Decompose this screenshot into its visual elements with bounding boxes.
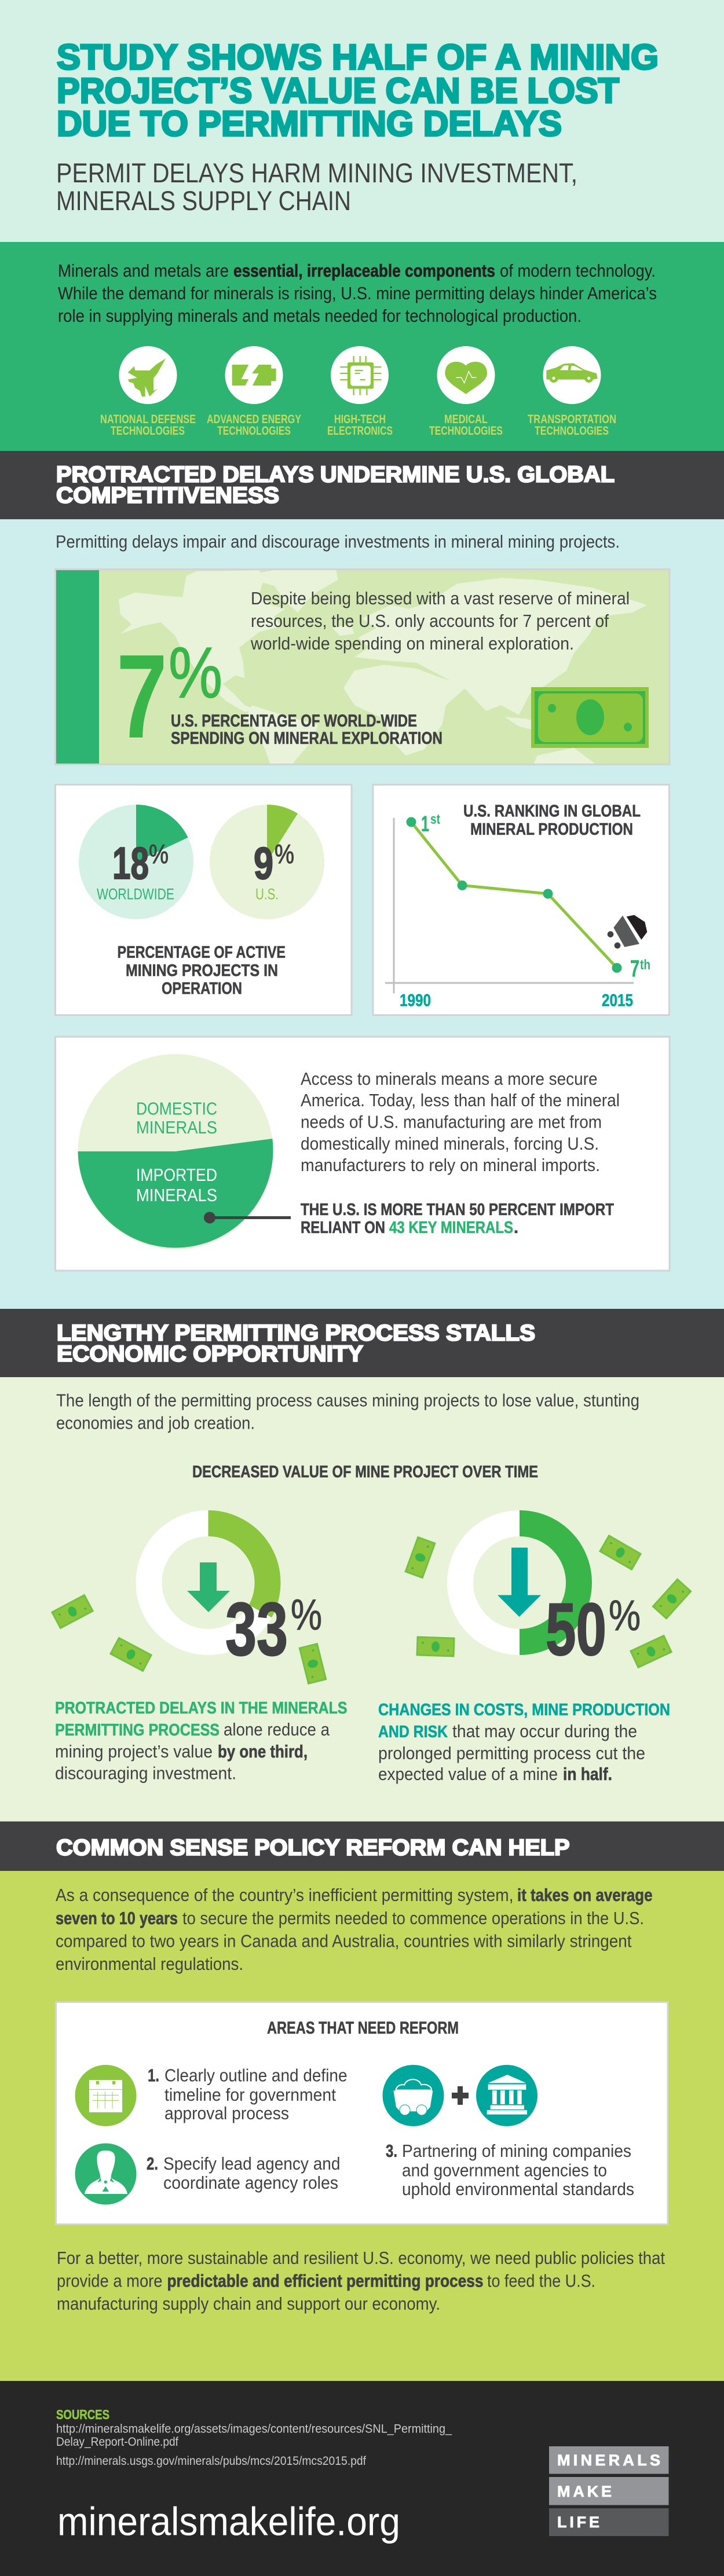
chart title: decreased value: DECREASED VALUE OF MINE PROJECT OVER TIME <box>192 1463 538 1481</box>
pie chart: worldwide <box>79 805 193 919</box>
text: reform intro: to secure the permits needed to commence operations in the U.S. <box>182 1908 644 1928</box>
heading: protracted delays: COMPETITIVENESS <box>56 483 279 508</box>
icon: dollar bill <box>531 687 649 748</box>
logo: minerals make life: LIFE <box>557 2513 599 2531</box>
text: protracted delays stat: PERMITTING PROCESS <box>55 1721 220 1740</box>
text: protracted delays stat: PROTRACTED DELAYS IN THE MINERALS <box>55 1699 348 1718</box>
logo: minerals make life: MINERALS <box>557 2452 660 2469</box>
sources: http://mineralsmakelife.org/assets/images/content/resources/SNL_Permitting_ <box>56 2422 452 2436</box>
icon labels: TECHNOLOGIES <box>535 424 609 438</box>
text: reform intro: As a consequence of the country’s inefficient permitting system, <box>56 1885 513 1905</box>
icon labels: ELECTRONICS <box>327 424 393 438</box>
text: changes in costs stat <box>378 1701 670 1784</box>
item 2 text <box>147 2153 341 2193</box>
body text: manufacturers to rely on mineral imports. <box>301 1155 600 1175</box>
icon: government building <box>476 2065 537 2126</box>
sources: SOURCES <box>56 2407 109 2422</box>
icon: battery <box>225 346 283 404</box>
website: mineralsmakelife.org <box>57 2500 400 2544</box>
text: reform intro <box>56 1885 652 1974</box>
body text: America. Today, less than half of the mineral <box>301 1090 620 1110</box>
panel: minerals and technology intro <box>0 242 724 452</box>
pie chart: domestic vs imported: MINERALS <box>136 1117 217 1137</box>
caption: MINING PROJECTS IN <box>126 962 278 980</box>
caption: PERCENTAGE OF ACTIVE <box>117 944 286 962</box>
panel: 7 percent spending <box>56 570 670 764</box>
text: protracted delays stat: mining project’s value <box>55 1741 213 1762</box>
body text: needs of U.S. manufacturing are met from <box>301 1111 602 1132</box>
pie chart: domestic vs imported <box>78 1054 291 1249</box>
item 1 text: 1. <box>148 2065 159 2085</box>
text: reform conclusion: predictable and efficient permitting process <box>167 2270 483 2291</box>
subtitle: MINERALS SUPPLY CHAIN <box>56 185 351 216</box>
panel: global competitiveness section background <box>0 519 724 1309</box>
item 3 text <box>386 2141 634 2199</box>
icon: plus <box>452 2086 469 2105</box>
item 1 text: timeline for government <box>164 2085 336 2105</box>
world map <box>119 570 647 764</box>
panel: policy reform section background <box>0 1871 724 2381</box>
icon labels: TECHNOLOGIES <box>429 424 503 438</box>
icons: falling money <box>51 1535 692 1685</box>
line chart: 7 <box>630 955 639 982</box>
icon labels: ADVANCED ENERGY <box>207 413 301 426</box>
logo: minerals make life <box>549 2446 668 2536</box>
pie chart: worldwide: 18 <box>112 838 149 889</box>
body text <box>301 1069 620 1175</box>
icon: heart with pulse <box>437 346 495 404</box>
text: reform conclusion: provide a more <box>57 2270 162 2291</box>
body text: Access to minerals means a more secure <box>301 1069 598 1089</box>
item 2 text: 2. <box>147 2153 158 2174</box>
intro text: While the demand for minerals is rising, U.S. mine permitting delays hinder America’s <box>58 283 657 303</box>
item 3 text: 3. <box>386 2141 397 2161</box>
subtitle: PERMIT DELAYS HARM MINING INVESTMENT, <box>56 157 577 188</box>
sources: Delay_Report-Online.pdf <box>56 2435 178 2449</box>
intro text: Minerals and metals are <box>58 260 229 281</box>
subtitle <box>56 157 577 216</box>
icon: car <box>543 346 601 404</box>
donut chart: 50 percent <box>460 1524 641 1671</box>
icon: person <box>75 2143 137 2204</box>
text: changes in costs stat: CHANGES IN COSTS, MINE PRODUCTION <box>378 1701 670 1719</box>
icon labels: MEDICAL <box>444 413 488 426</box>
text: protracted delays stat: discouraging investment. <box>55 1763 236 1783</box>
pie chart: domestic vs imported: MINERALS <box>136 1185 217 1205</box>
body text: Despite being blessed with a vast reserve of mineral <box>251 588 630 608</box>
sources: http://minerals.usgs.gov/minerals/pubs/mcs/2015/mcs2015.pdf <box>56 2454 366 2468</box>
pie chart: worldwide: WORLDWIDE <box>97 886 174 903</box>
intro text: role in supplying minerals and metals needed for technological production. <box>58 306 582 326</box>
callout: RELIANT ON <box>301 1219 385 1237</box>
callout <box>301 1201 614 1237</box>
intro text <box>58 260 657 326</box>
text: reform conclusion: to feed the U.S. <box>487 2270 595 2291</box>
item 2 text: Specify lead agency and <box>163 2153 341 2174</box>
body text <box>250 588 630 654</box>
text: changes in costs stat: in half. <box>563 1764 612 1784</box>
heading: lengthy permitting process: ECONOMIC OPPORTUNITY <box>57 1342 363 1366</box>
item 1 text: Clearly outline and define <box>164 2065 348 2085</box>
text: changes in costs stat: expected value of a mine <box>378 1764 558 1784</box>
text: permitting intro: economies and job creation. <box>56 1412 255 1433</box>
line chart: 1990 <box>400 991 431 1010</box>
panel: U.S. ranking line chart <box>373 785 670 1015</box>
icon labels: TRANSPORTATION <box>528 413 616 426</box>
chart title: U.S. RANKING IN GLOBAL <box>463 802 641 821</box>
heading: protracted delays <box>0 451 724 519</box>
stat: 7 percent <box>116 630 222 763</box>
line chart: 1 <box>421 812 429 836</box>
title: PROJECT’S VALUE CAN BE LOST <box>57 71 619 110</box>
chart title <box>463 802 641 839</box>
panel heading: AREAS THAT NEED REFORM <box>267 2019 459 2038</box>
panel: areas that need reform <box>56 2002 668 2224</box>
item 3 text: uphold environmental standards <box>402 2179 634 2199</box>
line chart <box>385 812 650 1010</box>
text: reform intro: compared to two years in Canada and Australia, countries with similarly stringent <box>56 1931 632 1951</box>
text: section intro: Permitting delays impair and discourage investments in mineral mining projects. <box>56 531 620 552</box>
line chart: st <box>430 812 440 827</box>
icon labels <box>100 413 616 438</box>
text: changes in costs stat: that may occur during the <box>452 1721 637 1741</box>
icon: mine cart <box>382 2065 444 2126</box>
stat: 7 percent: 7 <box>116 630 167 763</box>
text: reform conclusion <box>57 2248 665 2314</box>
icon: microchip <box>331 346 389 404</box>
text: permitting intro: The length of the permitting process causes mining projects to lose value, stunting <box>56 1390 639 1410</box>
icon labels: TECHNOLOGIES <box>217 424 291 438</box>
title: STUDY SHOWS HALF OF A MINING <box>57 37 659 76</box>
stat: 50 percent: 50 <box>546 1588 606 1671</box>
body text: domestically mined minerals, forcing U.S. <box>301 1133 599 1154</box>
item 3 text: Partnering of mining companies <box>402 2141 631 2161</box>
intro text: essential, irreplaceable components <box>233 260 495 281</box>
stat: 33 percent: 33 <box>225 1587 288 1671</box>
text: protracted delays stat <box>55 1699 348 1783</box>
stat: 50 percent: % <box>609 1591 641 1639</box>
callout: . <box>514 1219 518 1237</box>
body text: world-wide spending on mineral exploration. <box>250 633 574 654</box>
icon labels: HIGH-TECH <box>334 413 386 426</box>
arrow: down <box>498 1548 541 1617</box>
pie chart: U.S.: U.S. <box>255 886 279 903</box>
pie chart: U.S.: % <box>275 839 294 869</box>
heading: common sense reform <box>0 1821 724 1871</box>
chart title: MINERAL PRODUCTION <box>470 820 633 839</box>
stat: 33 percent: % <box>291 1590 322 1639</box>
icon labels: TECHNOLOGIES <box>111 424 185 438</box>
stat label: SPENDING ON MINERAL EXPLORATION <box>171 729 443 748</box>
pie chart: U.S. <box>210 805 324 919</box>
body text: resources, the U.S. only accounts for 7 percent of <box>251 611 609 631</box>
icon: fighter jet <box>119 346 177 404</box>
text: changes in costs stat: AND RISK <box>378 1723 448 1741</box>
line chart: th <box>640 957 650 973</box>
stat label: U.S. PERCENTAGE OF WORLD-WIDE <box>171 711 417 731</box>
heading: lengthy permitting process <box>0 1309 724 1377</box>
panel: import reliance <box>56 1037 670 1271</box>
title <box>57 37 659 144</box>
callout: THE U.S. IS MORE THAN 50 PERCENT IMPORT <box>301 1201 614 1219</box>
text: reform intro: seven to 10 years <box>56 1908 178 1928</box>
intro text: of modern technology. <box>500 260 656 281</box>
stat label <box>171 711 443 748</box>
heading: common sense reform: COMMON SENSE POLICY REFORM CAN HELP <box>56 1835 569 1861</box>
text: protracted delays stat: by one third, <box>218 1741 308 1762</box>
title: DUE TO PERMITTING DELAYS <box>57 104 562 144</box>
text: permitting intro <box>56 1390 639 1433</box>
icon: calendar <box>75 2065 137 2126</box>
heading: lengthy permitting process: LENGTHY PERMITTING PROCESS STALLS <box>57 1321 535 1345</box>
heading: protracted delays: PROTRACTED DELAYS UNDERMINE U.S. GLOBAL <box>56 462 615 487</box>
panel: footer <box>0 2381 724 2576</box>
logo: minerals make life: MAKE <box>557 2483 612 2500</box>
stat: 7 percent: % <box>169 633 222 713</box>
item 1 text: approval process <box>164 2103 289 2123</box>
pie chart: domestic vs imported: DOMESTIC <box>136 1099 217 1118</box>
caption <box>117 944 286 998</box>
pie chart: worldwide: % <box>149 839 169 869</box>
callout: 43 KEY MINERALS <box>389 1219 513 1237</box>
caption: OPERATION <box>162 979 242 998</box>
icon: mine cart <box>608 915 647 949</box>
text: reform conclusion: For a better, more sustainable and resilient U.S. economy, we need public policies that <box>57 2248 665 2268</box>
text: reform conclusion: manufacturing supply chain and support our economy. <box>57 2294 440 2314</box>
text: changes in costs stat: prolonged permitting process cut the <box>378 1743 645 1763</box>
line chart: 2015 <box>602 991 633 1010</box>
pie chart: U.S.: 9 <box>254 838 273 889</box>
donut chart: 33 percent <box>149 1524 322 1671</box>
arrow: down <box>187 1562 230 1612</box>
item 2 text: coordinate agency roles <box>163 2173 338 2193</box>
pie chart: domestic vs imported: IMPORTED <box>136 1165 217 1185</box>
icon labels: NATIONAL DEFENSE <box>100 413 196 426</box>
panel: permitting process section background <box>0 1377 724 1822</box>
text: reform intro: environmental regulations. <box>56 1954 243 1974</box>
item 1 text <box>148 2065 348 2123</box>
text: reform intro: it takes on average <box>517 1885 652 1905</box>
sources <box>56 2407 452 2468</box>
item 3 text: and government agencies to <box>402 2160 607 2180</box>
panel: active mining projects <box>56 785 352 1015</box>
panel: header <box>0 0 724 242</box>
text: protracted delays stat: alone reduce a <box>224 1719 330 1740</box>
